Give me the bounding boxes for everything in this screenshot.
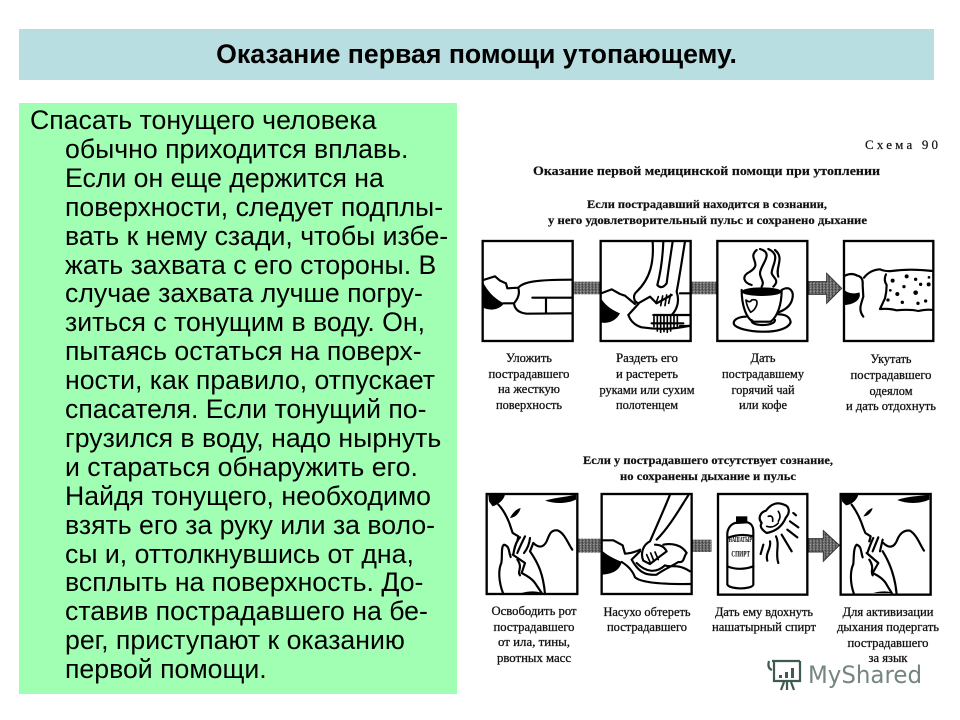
panel: rescue instructions text: случае захвата лучше погру-: [65, 278, 423, 308]
captions: row 1: или кофе: [739, 397, 787, 412]
captions: row 2: от ила, тины,: [498, 634, 570, 649]
icon: undress and rub the victim: [601, 241, 691, 341]
panel: rescue instructions text: и стараться обнаружить его.: [65, 452, 418, 482]
panel: rescue instructions text: [19, 103, 457, 694]
watermark: MyShared logo: MyShared: [808, 661, 922, 689]
captions: row 1: Уложить: [506, 350, 552, 365]
captions: row 1: одеялом: [870, 383, 912, 398]
captions: row 1: и растереть: [616, 366, 678, 381]
captions: row 2: пострадавшего: [494, 619, 574, 634]
panel: rescue instructions text: Найдя тонущего, необходимо: [65, 481, 431, 511]
captions: row 1: горячий чай: [732, 382, 795, 397]
panel: rescue instructions text: пытаясь остаться на поверх-: [65, 336, 422, 366]
panel: rescue instructions text: жать захвата с его стороны. В: [65, 250, 436, 280]
icon: wipe the victim dry: [602, 494, 692, 594]
icon: ammonia bottle and vapour: [718, 494, 807, 595]
icon: hot cup of tea or coffee: [717, 241, 807, 341]
captions: row 2: нашатырный спирт: [712, 619, 816, 634]
arrow: row 1 steps: [573, 282, 711, 294]
row 1 heading: [548, 197, 868, 227]
captions: row 1: Раздеть его: [616, 350, 678, 365]
captions: row 2: пострадавшего: [607, 619, 687, 634]
captions: row 2: Дать ему вдохнуть: [715, 604, 813, 619]
icon: wrap in a blanket: [844, 241, 933, 341]
arrow: row 1 end: [710, 273, 842, 303]
row 2 heading: Если у пострадавшего отсутствует сознание,: [583, 453, 833, 467]
row 1 heading: у него удовлетворительный пульс и сохранено дыхание: [548, 213, 868, 227]
panel: rescue instructions text: грузился в воду, надо нырнуть: [65, 423, 441, 453]
captions: row 1: пострадавшему: [722, 366, 804, 381]
panel: rescue instructions text: обычно приходится вплавь.: [65, 134, 408, 164]
captions: row 1: [488, 350, 936, 413]
captions: row 2: пострадавшего: [848, 635, 928, 650]
panel: rescue instructions text: вать к нему сзади, чтобы избе-: [65, 221, 448, 251]
captions: row 1: Укутать: [870, 351, 912, 366]
arrow: row 2 end: [808, 531, 839, 561]
row 2 heading: но сохранены дыхание и пульс: [620, 469, 797, 483]
captions: row 2: Для активизации: [842, 604, 934, 619]
panel: rescue instructions text: Если он еще держится на: [65, 163, 384, 193]
icon: ammonia bottle and vapour: НАШАТЫР: [729, 535, 752, 544]
row 1 heading: Если пострадавший находится в сознании,: [587, 197, 827, 211]
captions: row 1: пострадавшего: [488, 366, 570, 381]
panel: rescue instructions text: сы и, оттолкнувшись от дна,: [65, 539, 414, 569]
captions: row 1: поверхность: [496, 397, 562, 412]
scheme number: Схема 90: [865, 137, 938, 152]
captions: row 2: дыхания подергать: [837, 619, 939, 634]
captions: row 1: и дать отдохнуть: [846, 398, 936, 413]
arrow: row 2 steps: [577, 539, 712, 553]
icon: ammonia bottle and vapour: СПИРТ: [731, 549, 750, 558]
captions: row 2: рвотных масс: [497, 650, 571, 665]
watermark: MyShared logo: [768, 661, 922, 690]
panel: rescue instructions text: ставив пострадавшего на бе-: [65, 596, 428, 626]
captions: row 1: пострадавшего: [850, 367, 932, 382]
captions: row 2: [492, 603, 939, 665]
captions: row 1: полотенцем: [616, 397, 678, 412]
captions: row 1: Дать: [750, 350, 776, 365]
icon: clear the mouth: [487, 494, 577, 594]
captions: row 2: за язык: [868, 650, 908, 665]
captions: row 1: руками или сухим: [600, 382, 694, 397]
icon: tongue stimulation: [841, 494, 931, 595]
panel: rescue instructions text: спасателя. Если тонущий по-: [65, 394, 426, 424]
title: [19, 29, 934, 80]
captions: row 1: на жесткую: [498, 381, 560, 396]
captions: row 2: Освободить рот: [492, 603, 577, 618]
scheme heading: Оказание первой медицинской помощи при утоплении: [533, 163, 881, 178]
captions: row 2: Насухо обтереть: [604, 604, 691, 619]
title: Оказание первая помощи утопающему.: [216, 39, 737, 69]
panel: rescue instructions text: поверхности, следует подплы-: [65, 192, 443, 222]
panel: rescue instructions text: ности, как правило, отпускает: [65, 365, 435, 395]
panel: rescue instructions text: первой помощи.: [65, 654, 267, 684]
panel: rescue instructions text: Спасать тонущего человека: [30, 105, 376, 135]
panel: rescue instructions text: рег, приступают к оказанию: [65, 625, 405, 655]
panel: rescue instructions text: всплыть на поверхность. До-: [65, 567, 423, 597]
icon: lay the victim on a hard surface: [483, 241, 573, 341]
row 2 heading: [583, 453, 833, 483]
panel: rescue instructions text: зиться с тонущим в воду. Он,: [65, 307, 425, 337]
panel: rescue instructions text: взять его за руку или за воло-: [65, 510, 435, 540]
